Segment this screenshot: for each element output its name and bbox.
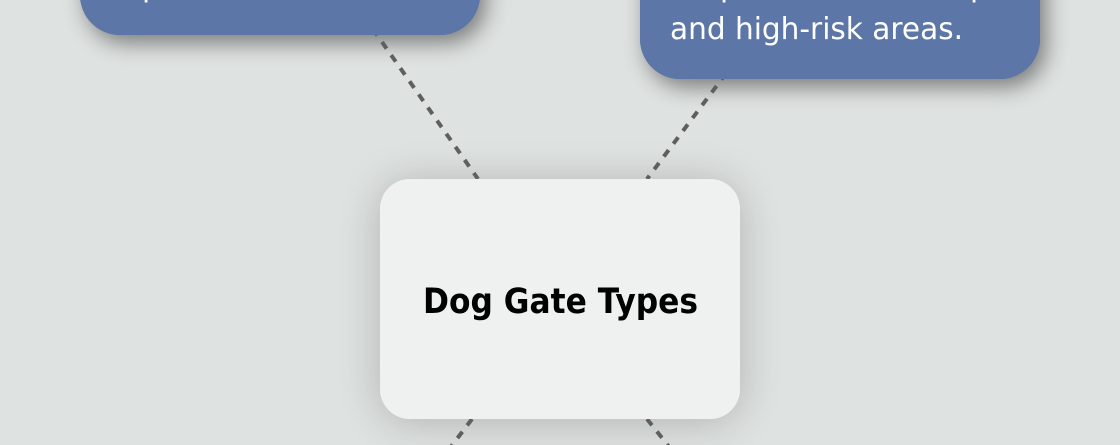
panel: central card [380, 179, 740, 419]
text: top-right card last line: and high-risk areas. [670, 12, 963, 47]
shape: central card fill over line [380, 179, 740, 419]
heading: Dog Gate Types: Dog Gate Types [423, 282, 698, 322]
panel: top-left blue card [80, 0, 480, 35]
shape: top-right card fill over line [640, 0, 1040, 79]
clipped text line: top-right card [720, 0, 989, 4]
shape: top-left card fill over line [80, 0, 480, 35]
panel: top-right blue card [640, 0, 1040, 79]
